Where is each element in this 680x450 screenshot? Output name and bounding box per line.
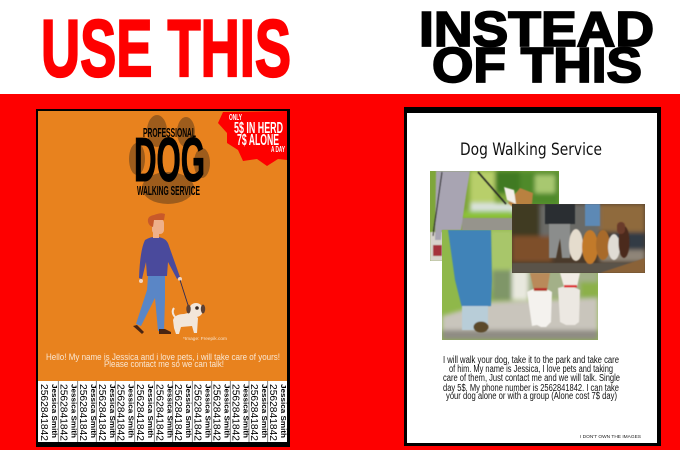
tear-off tabs: Jessica Smith — [126, 384, 136, 438]
tear-off tabs: Jessica Smith — [166, 384, 174, 438]
image credit: *Image: Freepik.com — [183, 336, 227, 341]
icon: paw print — [129, 115, 210, 204]
heading: professional dog walking service — [134, 126, 205, 198]
flyer title: Dog Walking Service — [460, 140, 602, 160]
heading: professional dog walking service: PROFESSIONAL — [143, 126, 196, 140]
photo: jeans and two terriers — [442, 230, 598, 340]
tear-off tabs: Jessica Smith — [108, 384, 117, 438]
tear-off tabs: 2562841842 — [154, 384, 164, 441]
heading: use this: USE THIS — [41, 4, 291, 94]
tear-off tabs: 2562841842 — [172, 384, 183, 441]
heading: instead of this — [419, 3, 654, 93]
tear-off tabs — [38, 381, 288, 442]
panel: good flyer — [36, 109, 290, 447]
tear-off tabs: Jessica Smith — [204, 384, 212, 438]
tear-off tabs: Jessica Smith — [184, 384, 193, 438]
intro text: Please contact me so we can talk! — [104, 359, 224, 369]
tear-off tabs: 2562841842 — [248, 384, 259, 441]
tear-off tabs: 2562841842 — [230, 384, 240, 441]
body paragraph — [443, 355, 620, 402]
body paragraph: of him. My name is Jessica, I love pets and taking — [449, 364, 613, 375]
illustration: dog — [173, 303, 205, 334]
tear-off tabs: 2562841842 — [134, 384, 145, 441]
tear-off tabs: 2562841842 — [77, 384, 88, 441]
photo: walker and beagle — [430, 171, 560, 261]
price burst callout: 7$ ALONE — [237, 132, 279, 149]
body paragraph: care of them, Just contact me and we will talk. Single — [443, 373, 620, 384]
illustration: man walking — [133, 213, 182, 334]
body paragraph: day 5$. My phone number is 2562841842. I can take — [443, 383, 619, 394]
tear-off tabs: Jessica Smith — [279, 384, 288, 438]
tear-off tabs: 2562841842 — [38, 384, 49, 441]
photo: walker with dog pack — [512, 204, 645, 273]
price burst callout: ONLY — [229, 113, 242, 122]
intro text: Hello! My name is Jessica and i love pets, i will take care of yours! — [46, 352, 280, 362]
tear-off tabs: 2562841842 — [267, 384, 278, 441]
tear-off tabs: Jessica Smith — [50, 384, 59, 438]
price burst callout: 5$ IN HERD — [234, 120, 283, 137]
illustration: leash — [180, 280, 188, 305]
price burst callout — [218, 111, 287, 166]
tear-off tabs: Jessica Smith — [242, 384, 250, 438]
tear-off tabs: Jessica Smith — [146, 384, 155, 438]
tear-off tabs: Jessica Smith — [70, 384, 78, 438]
tear-off tabs: Jessica Smith — [89, 384, 98, 438]
price burst callout: A DAY — [271, 145, 285, 154]
heading: instead of this: INSTEAD — [419, 3, 654, 57]
tear-off tabs: 2562841842 — [210, 384, 222, 441]
intro text — [46, 352, 280, 369]
tear-off tabs: 2562841842 — [58, 384, 68, 441]
heading: professional dog walking service: DOG — [134, 126, 205, 195]
panel: bad flyer — [404, 107, 661, 446]
tear-off tabs: 2562841842 — [114, 384, 126, 441]
image disclaimer: I DON'T OWN THE IMAGES — [580, 434, 641, 439]
tear-off tabs: Jessica Smith — [260, 384, 269, 438]
heading: professional dog walking service: WALKING SERVICE — [137, 183, 200, 198]
body paragraph: your dog alone or with a group (Alone cost 7$ day) — [446, 391, 617, 402]
red background band — [0, 94, 680, 450]
body paragraph: I will walk your dog, take it to the park and take care — [443, 355, 619, 366]
tear-off tabs: 2562841842 — [192, 384, 202, 441]
tear-off tabs: Jessica Smith — [222, 384, 232, 438]
tear-off tabs: 2562841842 — [96, 384, 107, 441]
heading: instead of this: OF THIS — [432, 39, 642, 93]
